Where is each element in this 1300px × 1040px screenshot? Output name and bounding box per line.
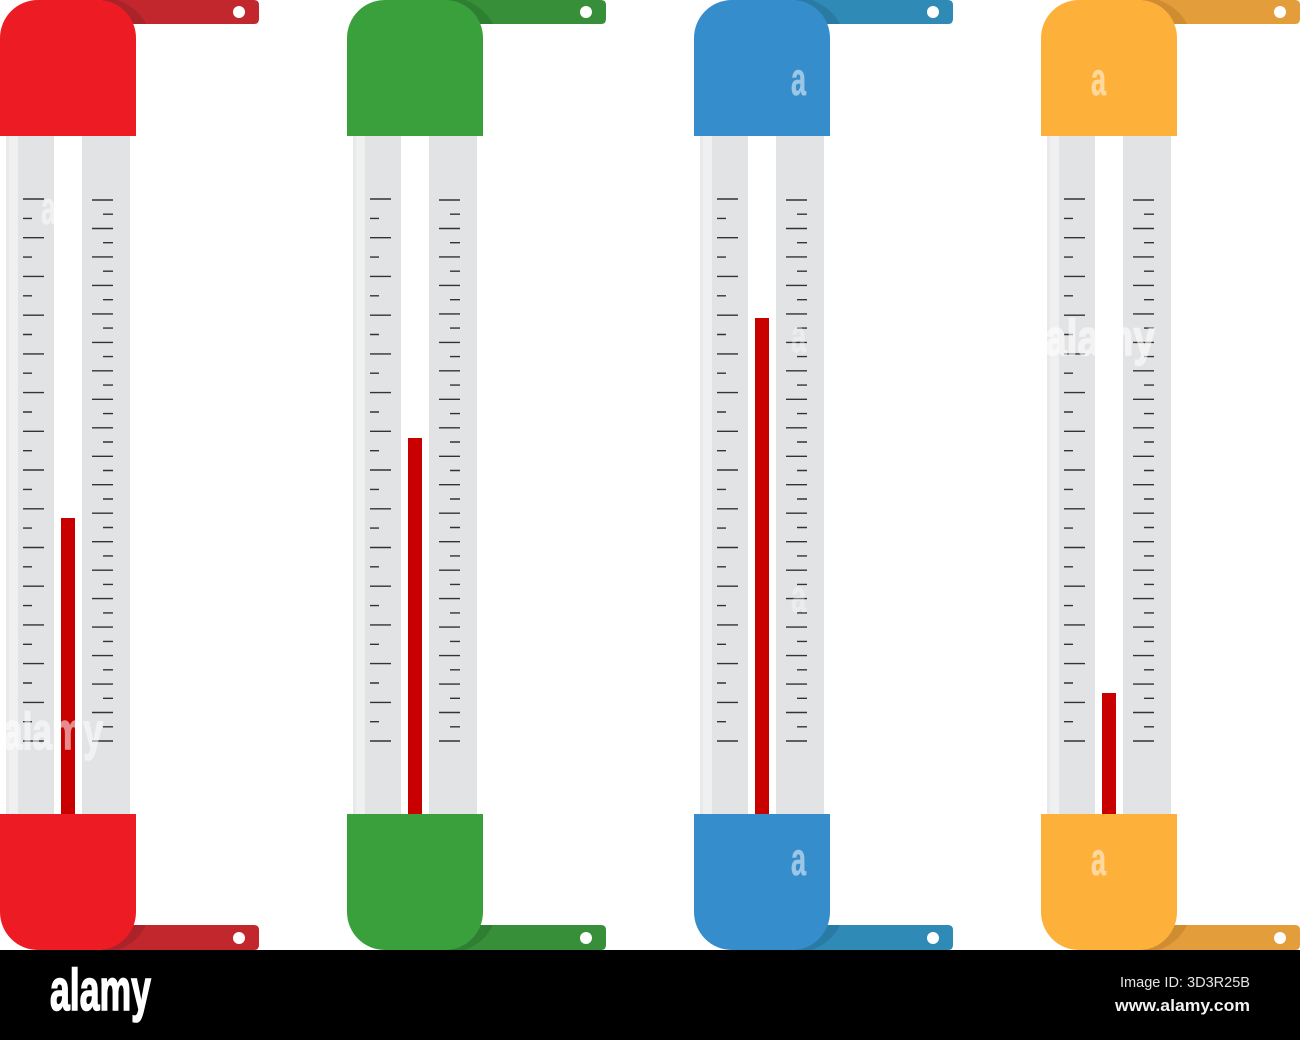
mounting tab: red top <box>100 0 259 24</box>
glass tube with scales: blue <box>700 136 824 814</box>
watermark overlays: a <box>41 182 56 234</box>
mounting tab: blue bottom <box>794 925 953 950</box>
cap: red top <box>0 0 136 136</box>
thermometer: green <box>347 0 606 950</box>
glass tube with scales: orange <box>1047 136 1171 814</box>
cap: orange bottom <box>1041 814 1177 950</box>
thermometer: blue <box>694 0 953 950</box>
mounting tab: orange top <box>1141 0 1300 24</box>
mercury column: red <box>61 518 75 814</box>
watermark overlays: a <box>791 570 806 622</box>
watermark overlays: a <box>1091 833 1106 885</box>
mercury column: blue <box>755 318 769 814</box>
cap: green bottom <box>347 814 483 950</box>
footer bar <box>0 950 1300 1040</box>
mounting tab: orange bottom <box>1141 925 1300 950</box>
watermark overlays: a <box>791 53 806 105</box>
watermark overlays: alamy <box>3 703 103 761</box>
mercury column: green <box>408 438 422 814</box>
mounting tab: green bottom <box>447 925 606 950</box>
footer website: www.alamy.com <box>1114 996 1250 1015</box>
mercury column: orange <box>1102 693 1116 814</box>
watermark overlays: alamy <box>1045 310 1155 366</box>
watermark overlays: a <box>791 833 806 885</box>
cap: red bottom <box>0 814 136 950</box>
mounting tab: red bottom <box>100 925 259 950</box>
footer image id: Image ID: 3D3R25B <box>1120 975 1250 991</box>
mounting tab: blue top <box>794 0 953 24</box>
watermark overlays <box>3 53 1155 885</box>
footer logo: alamy: alamy <box>50 958 151 1023</box>
watermark overlays: a <box>791 310 806 362</box>
cap: blue bottom <box>694 814 830 950</box>
thermometer: orange <box>1041 0 1300 950</box>
mounting tab: green top <box>447 0 606 24</box>
cap: green top <box>347 0 483 136</box>
glass tube with scales: red <box>6 136 130 814</box>
glass tube with scales: green <box>353 136 477 814</box>
watermark overlays: a <box>1091 53 1106 105</box>
thermometer: red <box>0 0 259 950</box>
cap: orange top <box>1041 0 1177 136</box>
cap: blue top <box>694 0 830 136</box>
